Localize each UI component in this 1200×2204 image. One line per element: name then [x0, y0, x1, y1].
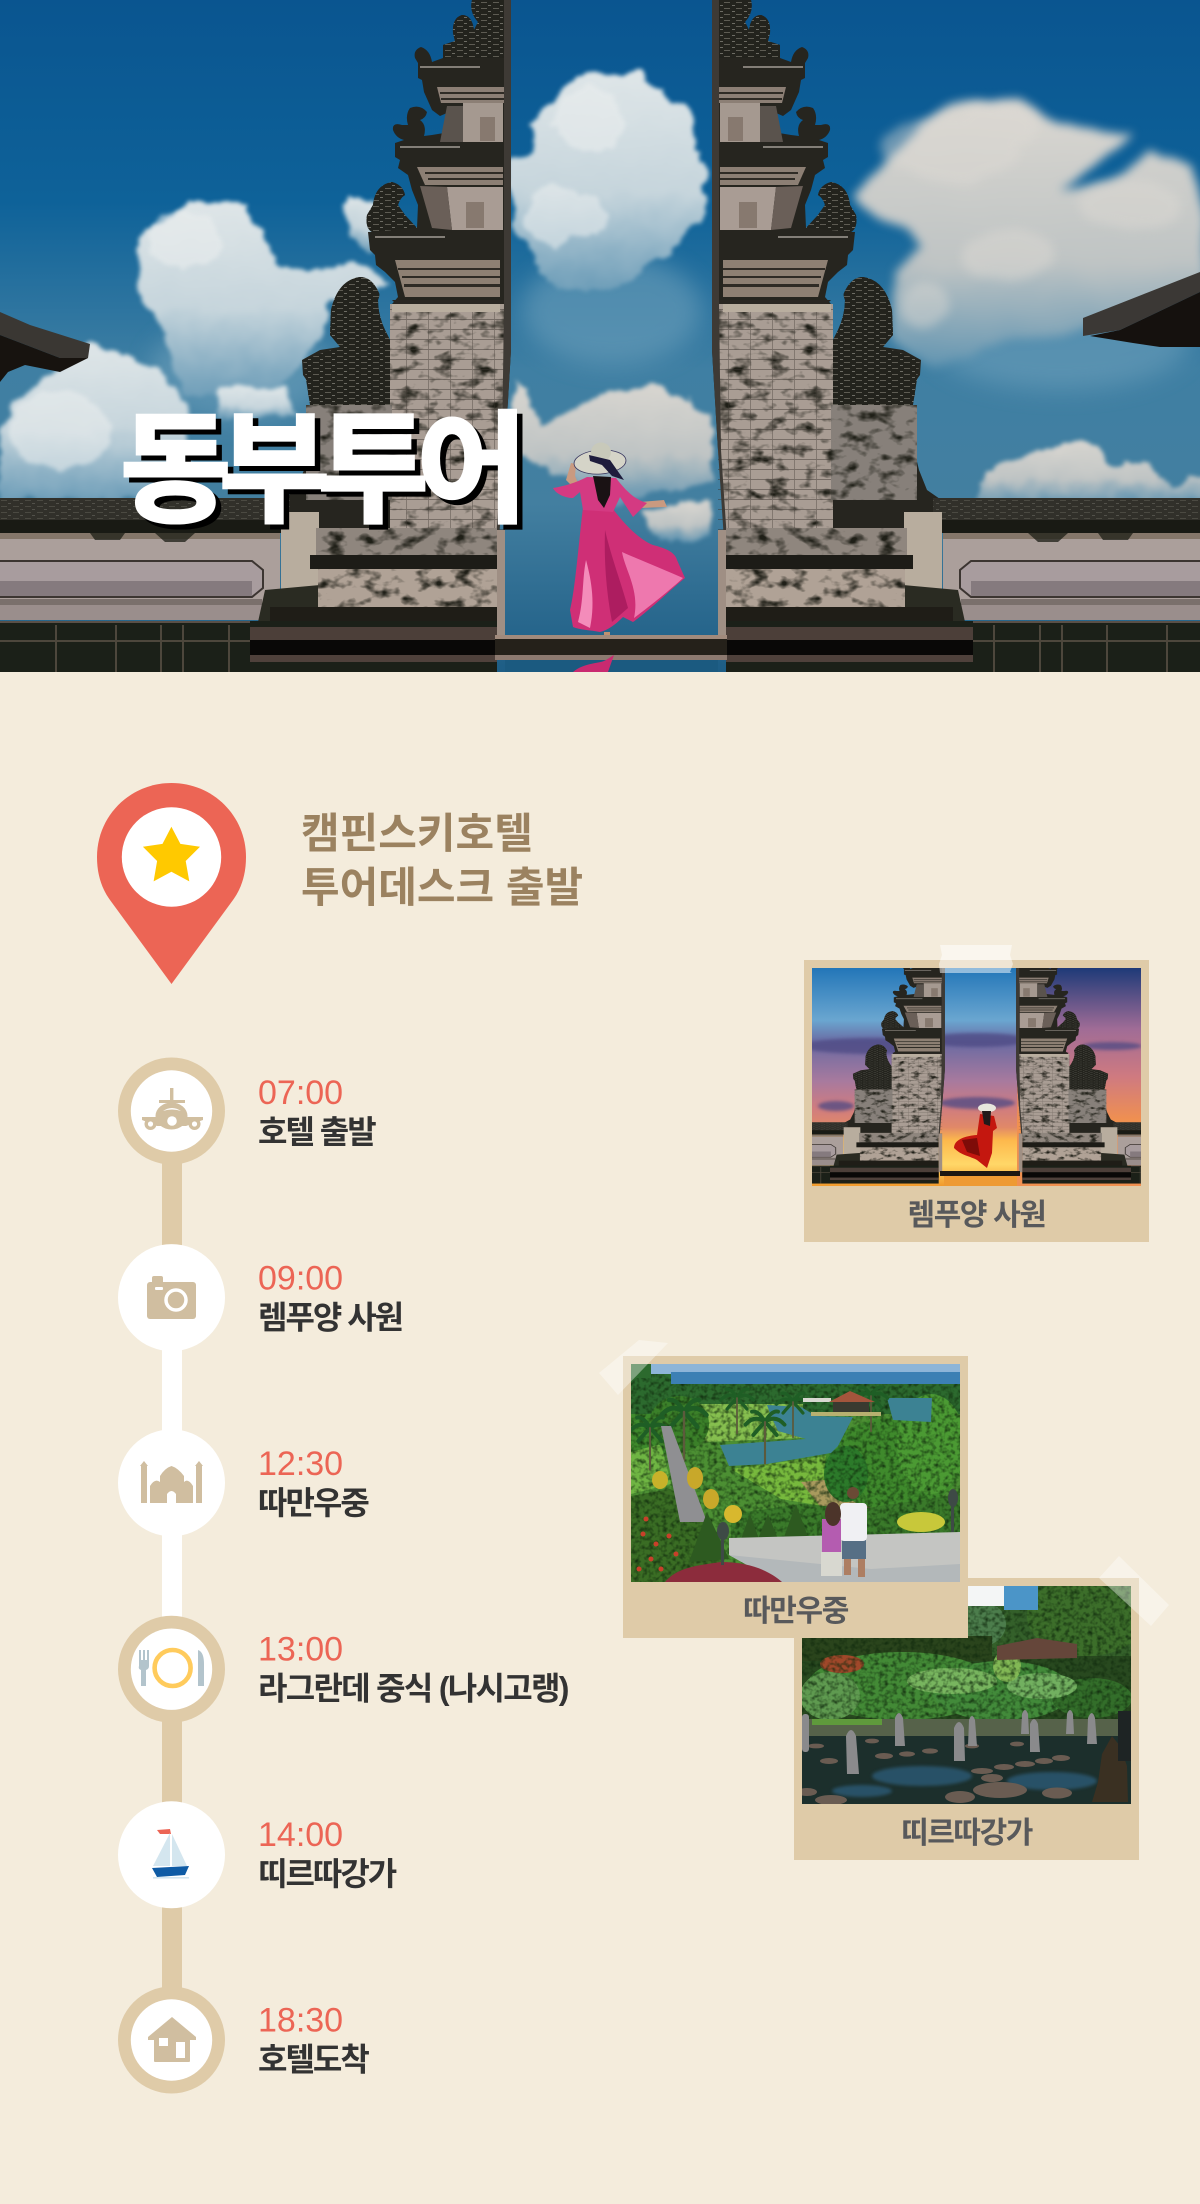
label: 호텔 출발 — [258, 1114, 376, 1150]
stop 1: hotel departure — [118, 1058, 376, 1164]
photo card: Lempuyang — [718, 945, 1200, 1242]
start location text: 캠핀스키호텔 — [301, 810, 533, 857]
time 12:30: 12:30 — [258, 1445, 343, 1483]
stop 3: Taman Ujung — [118, 1429, 369, 1536]
stone terrace — [729, 1532, 960, 1582]
couple — [821, 1487, 867, 1577]
yellow and red shrubs — [636, 1467, 945, 1572]
tape — [1099, 1556, 1169, 1626]
stop 2: Lempuyang temple — [118, 1244, 402, 1351]
icon: sailboat — [152, 1829, 189, 1879]
photo card: Tirta Gangga — [794, 1556, 1169, 1860]
icon: star — [143, 827, 200, 881]
photo: water garden with stepping stones — [802, 1586, 1131, 1804]
photo: gate at sunset — [812, 968, 1141, 1186]
stop 4: lunch — [118, 1616, 569, 1723]
hero title: 동부투어 — [120, 402, 515, 538]
icon: house — [148, 2017, 196, 2062]
time 18:30: 18:30 — [258, 2002, 343, 2040]
start location text: 투어데스크 출발 — [301, 864, 583, 911]
time 09:00: 09:00 — [258, 1260, 343, 1298]
photo: water palace gardens and couple — [631, 1364, 960, 1582]
lamp — [717, 1489, 958, 1565]
woman reflection — [573, 655, 614, 672]
palms — [630, 1387, 888, 1470]
time 13:00: 13:00 — [258, 1630, 343, 1668]
map pin: start point — [97, 783, 246, 984]
icon: airplane — [142, 1088, 203, 1130]
icon: plate and cutlery — [139, 1650, 204, 1686]
woman in red dress — [954, 1104, 997, 1168]
stepping stones — [797, 1739, 1072, 1805]
hero photo: temple gate with woman in pink dress — [0, 0, 1200, 672]
timeline connectors — [162, 1150, 182, 2040]
pavilion — [803, 1391, 881, 1416]
roofs — [0, 272, 1200, 382]
label: 따만우중 — [258, 1485, 369, 1521]
caption: 띠르따강가 — [901, 1817, 1033, 1850]
photo card: Taman Ujung — [599, 1340, 968, 1638]
caption: 따만우중 — [743, 1595, 849, 1628]
temple gate — [0, 0, 1200, 672]
clouds — [0, 71, 1200, 540]
label: 띠르따강가 — [258, 1856, 397, 1892]
time 14:00: 14:00 — [258, 1816, 343, 1854]
stop 5: Tirta Gangga — [118, 1801, 397, 1908]
time 07:00: 07:00 — [258, 1074, 343, 1112]
walkway — [661, 1426, 707, 1522]
label: 라그란데 중식 (나시고랭) — [258, 1670, 569, 1706]
label: 렘푸양 사원 — [258, 1300, 402, 1336]
stop 6: hotel arrival — [118, 1986, 369, 2094]
label: 호텔도착 — [258, 2042, 369, 2078]
tape — [939, 945, 1013, 973]
tape — [599, 1340, 668, 1395]
icon: palace — [140, 1461, 203, 1503]
icon: camera — [147, 1276, 196, 1319]
statues — [802, 1710, 1097, 1774]
caption: 렘푸양 사원 — [908, 1199, 1045, 1232]
lake — [720, 1405, 853, 1466]
woman in pink dress — [553, 442, 685, 635]
cypress trees — [689, 1504, 808, 1562]
